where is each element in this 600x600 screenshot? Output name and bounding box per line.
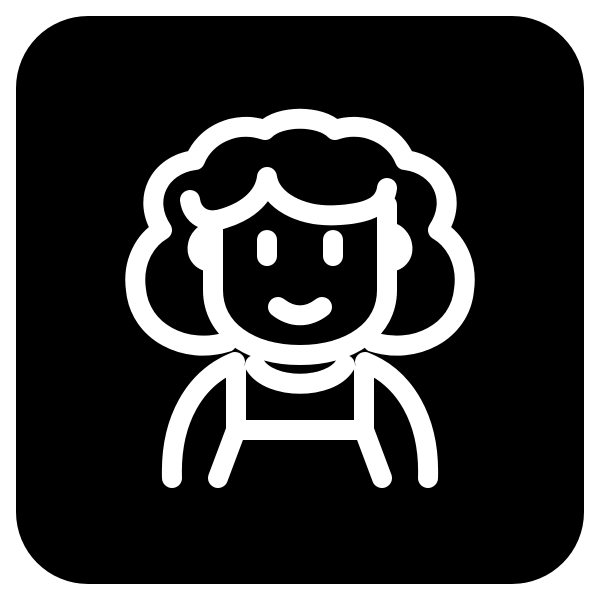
- face: [213, 205, 387, 355]
- hair bangs: [190, 177, 387, 220]
- collar: [255, 365, 345, 384]
- bib straps to bottom: [218, 430, 382, 478]
- hair outline: [135, 119, 465, 346]
- ears: [198, 232, 213, 262]
- shoulders: [172, 362, 235, 478]
- bib: [236, 370, 364, 430]
- figure: [135, 119, 465, 478]
- eyes: [267, 240, 333, 256]
- smile: [278, 307, 322, 315]
